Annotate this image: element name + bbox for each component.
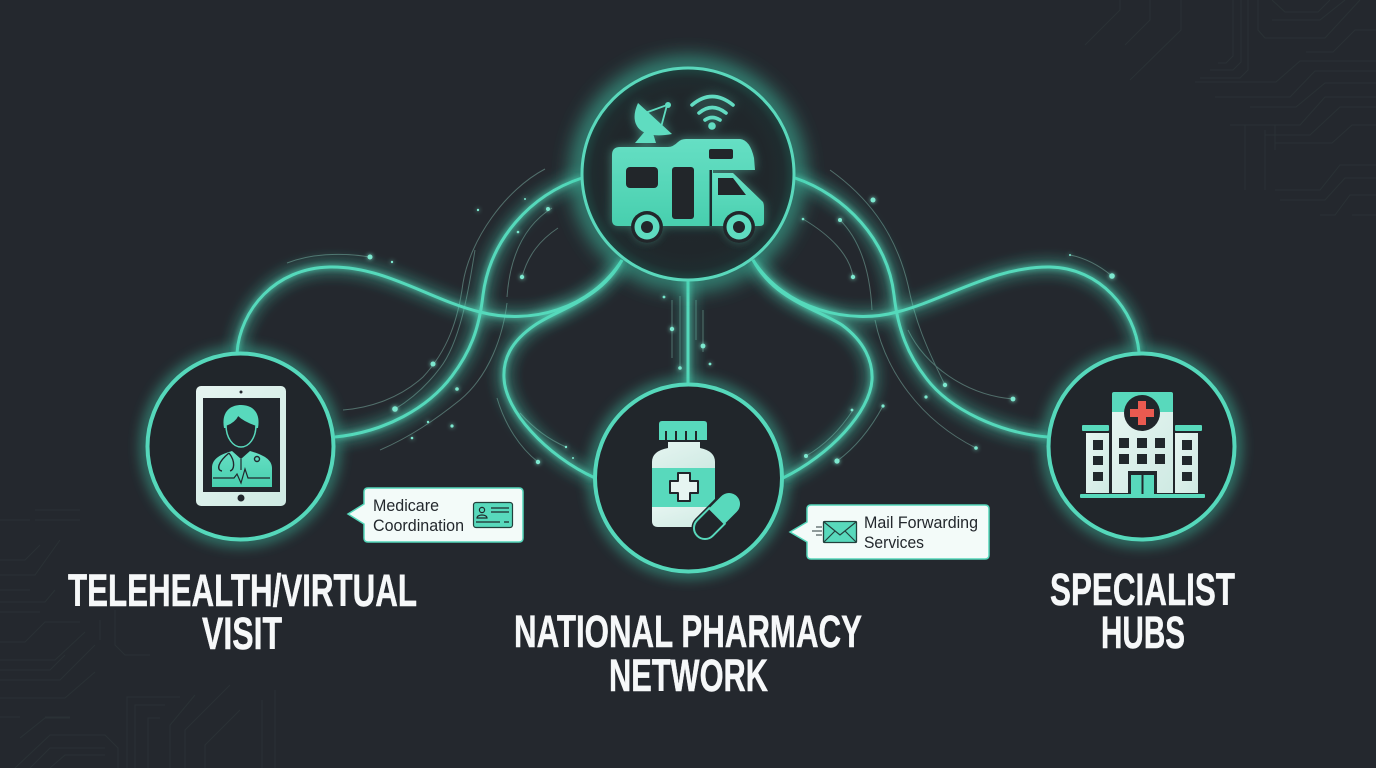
callout: Mail Forwarding Services: Mail Forwarding (864, 513, 978, 532)
RV body (612, 139, 755, 226)
node: specialist hubs (1048, 353, 1235, 540)
icon: medicine bottle and pill (652, 421, 745, 544)
title: Specialist Hubs (1050, 564, 1235, 658)
title: Specialist Hubs: SPECIALIST (1050, 564, 1235, 615)
callout: Medicare Coordination: Coordination (373, 516, 464, 535)
connector: right curves (753, 178, 1139, 478)
thin arc accents (287, 169, 1112, 462)
node: telehealth (147, 353, 334, 540)
callout: Medicare Coordination: Medicare (373, 496, 439, 515)
callout: Medicare Coordination (348, 488, 523, 542)
node: RV hub (582, 68, 794, 280)
icon: ID card (474, 502, 512, 528)
icon: RV with satellite and wifi (612, 96, 764, 243)
connector: vertical link (686, 276, 690, 386)
node: pharmacy (594, 384, 782, 572)
title: National Pharmacy Network: NATIONAL PHARMACY (514, 606, 862, 657)
title: Telehealth/Virtual Visit: VISIT (202, 608, 282, 659)
title: Telehealth/Virtual Visit (68, 565, 417, 659)
callout: Mail Forwarding Services (790, 505, 989, 559)
icon: tablet with doctor (196, 386, 286, 506)
title: National Pharmacy Network (514, 606, 862, 701)
connector: left curves (237, 178, 622, 478)
wifi (692, 96, 733, 120)
icon: envelope (812, 522, 856, 542)
glowing particles (368, 198, 1115, 464)
title: Specialist Hubs: HUBS (1101, 607, 1185, 658)
icon: hospital (1080, 392, 1205, 498)
title: Telehealth/Virtual Visit: TELEHEALTH/VIRTUAL (68, 565, 417, 616)
satellite dish (635, 103, 672, 135)
title: National Pharmacy Network: NETWORK (609, 650, 768, 701)
callout: Mail Forwarding Services: Services (864, 533, 924, 552)
